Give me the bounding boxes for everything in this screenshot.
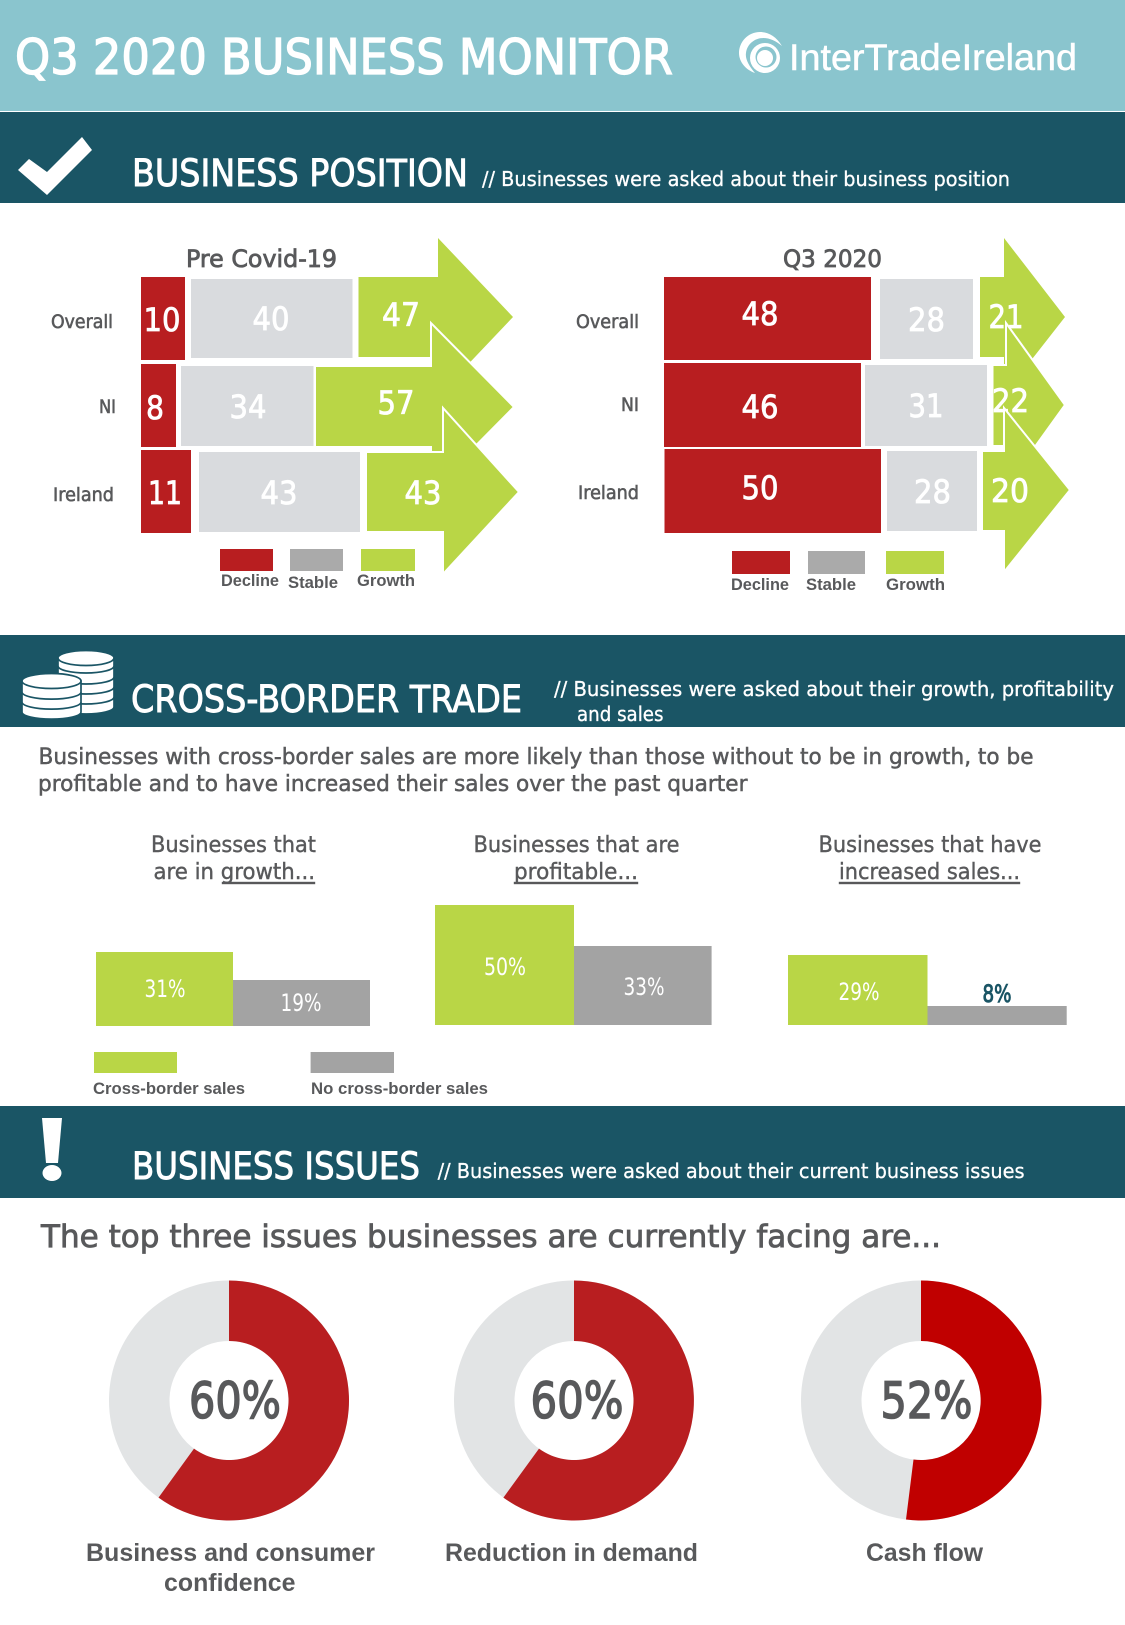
icon: exclamation mark — [42, 1118, 62, 1181]
row: overall: 48 — [742, 295, 778, 333]
section header: business issues — [0, 1106, 1125, 1198]
bars: increased sales: 29% — [838, 978, 880, 1006]
chart heading: growth — [151, 833, 316, 885]
row: ireland: Ireland — [578, 482, 639, 504]
legend: pre covid-19: Decline — [221, 571, 279, 590]
text block: cross-border summary: profitable and to have increased their sales over the past quarter — [38, 772, 748, 797]
heading: business issues: BUSINESS ISSUES — [132, 1145, 420, 1188]
chart heading: profitable: Businesses that are — [474, 833, 680, 858]
donut label: Business and consumer — [86, 1539, 375, 1567]
row: overall: 28 — [908, 301, 945, 339]
donut: cash flow: 52% — [880, 1372, 972, 1430]
donut: reduction in demand — [445, 1280, 698, 1567]
row: ni: 46 — [742, 388, 778, 426]
donut label: Cash flow — [866, 1539, 984, 1567]
bars: profitable: 50% — [484, 953, 526, 981]
legend: q3 2020: Growth — [886, 575, 945, 594]
bars: growth: 19% — [280, 989, 322, 1017]
row: overall: 10 — [144, 301, 180, 339]
row: overall: Overall — [576, 311, 639, 333]
legend: pre covid-19 — [220, 549, 415, 592]
bars: profitable — [435, 905, 712, 1025]
panel: q3 2020 chart — [576, 238, 1070, 594]
donut: reduction in demand: 60% — [530, 1372, 624, 1430]
chart title: q3 2020: Q3 2020 — [783, 245, 882, 273]
text block: cross-border summary: Businesses with cross-border sales are more likely than those without to be in growth, to be — [38, 745, 1034, 770]
logo: InterTradeIreland: InterTradeIreland — [789, 37, 1077, 78]
row: ireland: 20 — [991, 472, 1029, 510]
section header: cross-border trade — [0, 635, 1125, 727]
row: ni: NI — [99, 396, 116, 418]
row: ireland: Ireland — [53, 484, 114, 506]
legend: pre covid-19: Growth — [357, 571, 415, 590]
chart heading: increased sales: Businesses that have — [818, 833, 1042, 858]
panel: pre covid-19 chart — [51, 238, 519, 592]
heading: top three issues: The top three issues businesses are currently facing are... — [40, 1219, 941, 1255]
chart heading: growth: Businesses that — [151, 833, 316, 858]
bars: profitable: 33% — [624, 973, 664, 1001]
legend: cross-border sales: No cross-border sales — [311, 1079, 488, 1098]
donut label — [86, 1539, 375, 1597]
row: ireland: 43 — [404, 474, 442, 512]
chart heading: increased sales — [818, 833, 1042, 885]
bars: increased sales: 8% — [982, 980, 1012, 1008]
subheading: business issues: // Businesses were asked about their current business issues — [438, 1159, 1025, 1183]
row: ireland: 28 — [914, 473, 951, 511]
row: ireland: 43 — [260, 474, 298, 512]
subheading: cross-border trade: and sales — [577, 702, 664, 726]
donut label: Reduction in demand — [445, 1539, 698, 1567]
chart: businesses in growth — [96, 833, 370, 1026]
legend: q3 2020: Decline — [731, 575, 789, 594]
row: ni: 22 — [992, 382, 1029, 420]
heading: business position: BUSINESS POSITION — [132, 152, 468, 195]
row: ni: 31 — [908, 387, 944, 425]
chart heading: increased sales: increased sales... — [839, 860, 1020, 885]
heading: cross-border trade: CROSS-BORDER TRADE — [131, 678, 522, 721]
section header: business position — [0, 112, 1125, 203]
row: overall: 47 — [382, 296, 420, 334]
row: ni: 57 — [378, 384, 414, 422]
chart heading: profitable — [474, 833, 680, 885]
header band — [0, 0, 1125, 111]
row: ireland — [53, 408, 519, 574]
row: ireland: 50 — [742, 469, 778, 507]
row: ni: 8 — [146, 389, 164, 427]
subheading: cross-border trade — [554, 677, 1114, 726]
legend: q3 2020 — [731, 551, 945, 594]
chart heading: profitable: profitable... — [514, 860, 638, 885]
row: ni — [621, 323, 1065, 487]
row: overall: Overall — [51, 311, 113, 333]
chart: businesses profitable — [435, 833, 712, 1025]
row: ni: 34 — [230, 388, 266, 426]
row: ireland: 11 — [148, 474, 182, 512]
donut label: confidence — [164, 1569, 296, 1597]
legend: q3 2020: Stable — [806, 575, 856, 594]
row: overall: 40 — [252, 300, 290, 338]
legend: cross-border sales: Cross-border sales — [93, 1079, 245, 1098]
donut: business and consumer confidence: 60% — [189, 1372, 281, 1430]
bars: increased sales — [788, 955, 1067, 1025]
chart title: pre covid-19: Pre Covid-19 — [186, 245, 337, 273]
row: overall — [576, 238, 1065, 395]
chart: businesses with increased sales — [788, 833, 1067, 1025]
subheading: cross-border trade: // Businesses were asked about their growth, profitability — [554, 677, 1114, 701]
icon: check mark — [18, 137, 92, 195]
row: ireland — [578, 408, 1070, 572]
row: overall: 21 — [988, 298, 1024, 336]
bars: growth — [96, 952, 370, 1026]
donut: business and consumer confidence — [86, 1280, 375, 1597]
legend: pre covid-19: Stable — [288, 573, 338, 592]
donut: cash flow — [831, 1280, 1041, 1567]
text block: cross-border summary — [38, 745, 1034, 797]
chart heading: growth: are in growth... — [154, 860, 315, 885]
legend: cross-border sales — [93, 1052, 488, 1098]
title: Q3 2020 BUSINESS MONITOR — [15, 29, 673, 86]
row: ni — [99, 323, 514, 491]
subheading: business position: // Businesses were asked about their business position — [482, 167, 1010, 191]
row: overall — [51, 238, 513, 396]
bars: growth: 31% — [144, 975, 186, 1003]
icon: coin stacks — [22, 650, 114, 719]
row: ni: NI — [621, 394, 639, 416]
